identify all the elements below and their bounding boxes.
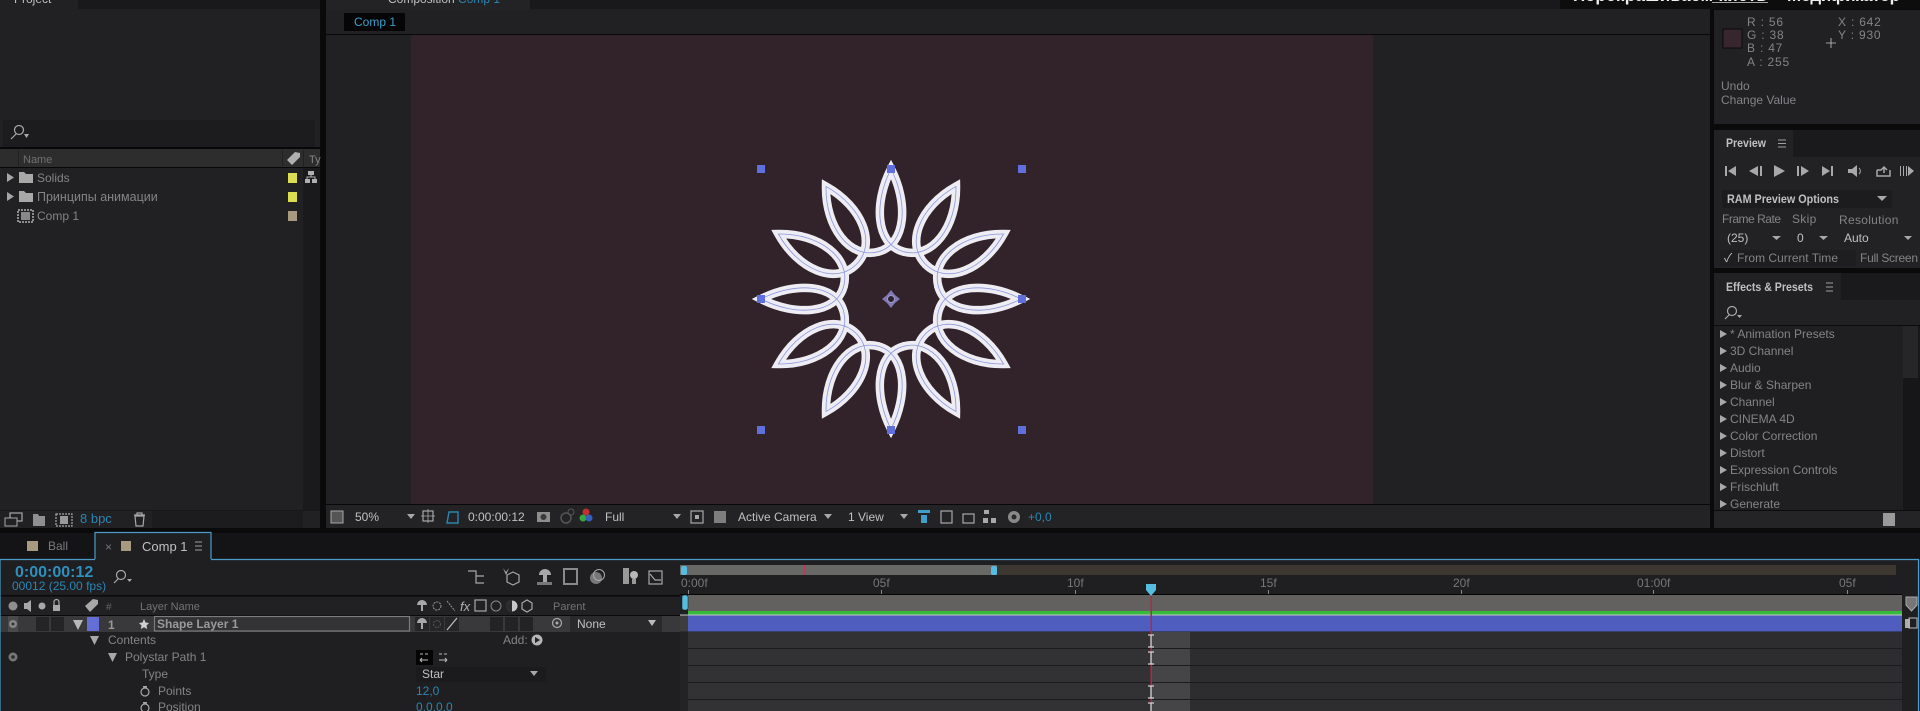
project item: Comp 1 xyxy=(18,209,297,223)
comp 1 breadcrumb chip xyxy=(344,13,405,31)
effects list: Color Correction xyxy=(1730,429,1817,443)
frame rate, skip, resolution: Resolution xyxy=(1839,213,1899,227)
effects list: Blur & Sharpen xyxy=(1730,378,1811,392)
time ruler: 10f xyxy=(1067,576,1084,590)
project search field xyxy=(3,120,315,147)
project footer toolbar: 8 bpc xyxy=(80,511,112,526)
time ruler xyxy=(681,576,1856,594)
playback checkbox options xyxy=(1720,250,1918,266)
colour values: A : 255 xyxy=(1747,55,1790,69)
time ruler: 0:00f xyxy=(681,576,708,590)
tab: Comp 1 active: Comp 1 xyxy=(142,539,188,554)
playback checkbox options: From Current Time xyxy=(1737,251,1838,265)
cursor position values: Y : 930 xyxy=(1838,28,1881,42)
playback checkbox options: Full Screen xyxy=(1860,251,1918,265)
shape layer row: 1 xyxy=(108,618,115,632)
render status green line xyxy=(688,611,1902,614)
project footer toolbar xyxy=(0,510,320,528)
panel: project xyxy=(0,0,321,528)
playhead xyxy=(1146,584,1156,711)
colour values: R : 56 xyxy=(1747,15,1784,29)
viewer toolbar xyxy=(326,505,1710,528)
shape layer row: Shape Layer 1 xyxy=(157,617,239,631)
project item: animation principles folder: Принципы анимации xyxy=(37,190,158,204)
RAM preview options dropdown xyxy=(1722,190,1892,208)
frame rate, skip, resolution: (25) xyxy=(1727,231,1748,245)
effects heading: Effects & Presets xyxy=(1726,280,1813,294)
RAM preview options dropdown: RAM Preview Options xyxy=(1727,192,1839,206)
layer column header: Layer Name xyxy=(140,601,200,613)
effects list: Generate xyxy=(1730,497,1780,511)
time ruler: 01:00f xyxy=(1637,576,1671,590)
frame rate, skip, resolution xyxy=(1722,212,1912,245)
type row: Star xyxy=(422,667,444,681)
effects list xyxy=(1716,326,1902,511)
effects list: Frischluft xyxy=(1730,480,1779,494)
project item: animation principles folder xyxy=(7,190,297,204)
tab: Comp 1 active: × xyxy=(105,540,112,554)
layer column header: # xyxy=(106,602,112,613)
layer column header xyxy=(0,597,680,615)
effects list: * Animation Presets xyxy=(1730,327,1835,341)
timeline toolbar icons xyxy=(468,568,662,585)
project column header xyxy=(0,149,321,167)
effects scrollbar xyxy=(1903,326,1920,510)
timeline panel outline xyxy=(0,560,1918,711)
frame rate, skip, resolution: Skip xyxy=(1792,212,1817,226)
polystar path row xyxy=(8,650,447,665)
effects list: CINEMA 4D xyxy=(1730,412,1795,426)
viewer toolbar: 0:00:00:12 xyxy=(468,510,525,524)
project item: Comp 1: Comp 1 xyxy=(37,209,79,223)
panel: preview xyxy=(1714,130,1920,268)
undo history text: Change Value xyxy=(1721,93,1796,107)
work area bar xyxy=(688,595,1902,611)
viewer toolbar: 1 View xyxy=(848,510,884,524)
colour values: G : 38 xyxy=(1747,28,1784,42)
comp 1 breadcrumb chip: Comp 1 xyxy=(354,15,396,29)
colour swatch xyxy=(1723,29,1742,48)
effects list: Channel xyxy=(1730,395,1775,409)
work area start handle xyxy=(682,595,688,610)
project column header: Ty xyxy=(309,154,321,166)
project item: Solids xyxy=(7,171,297,185)
time ruler: 20f xyxy=(1453,576,1470,590)
effects list: Distort xyxy=(1730,446,1765,460)
effects footer xyxy=(1714,510,1920,528)
colour values: B : 47 xyxy=(1747,41,1783,55)
keyframe markers on playhead xyxy=(1148,635,1154,711)
cursor position values xyxy=(1826,15,1882,48)
cursor position values: X : 642 xyxy=(1838,15,1882,29)
layer column header: Parent xyxy=(553,601,585,613)
playback checkbox options: ✓ xyxy=(1724,251,1733,265)
contents row: Contents xyxy=(108,633,156,647)
effects list: 3D Channel xyxy=(1730,344,1793,358)
viewer toolbar: Active Camera xyxy=(738,510,817,524)
shape layer row: None xyxy=(577,617,606,631)
position row xyxy=(141,700,453,711)
effects search xyxy=(1716,300,1920,325)
preview heading: Preview xyxy=(1726,136,1767,150)
time navigator xyxy=(680,565,1896,575)
type row: Type xyxy=(142,667,168,681)
contents row xyxy=(90,633,542,647)
time ruler: 05f xyxy=(873,576,890,590)
timeline search icon xyxy=(114,570,132,583)
frame rate, skip, resolution: Frame Rate xyxy=(1722,212,1781,226)
points row: 12,0 xyxy=(416,684,440,698)
icon: type column network xyxy=(305,171,317,183)
layer column header: fx xyxy=(460,599,471,614)
playback controls xyxy=(1725,165,1914,177)
panel: effects and presets xyxy=(1714,273,1920,528)
tab: Ball xyxy=(27,539,68,553)
project item: Solids: Solids xyxy=(37,171,70,185)
undo history text: Undo xyxy=(1721,79,1750,93)
top right heading fragments xyxy=(1560,0,1920,9)
tab: Ball: Ball xyxy=(48,539,68,553)
tab: Comp 1 active xyxy=(95,532,211,559)
colour values xyxy=(1747,15,1790,69)
undo history text xyxy=(1721,79,1796,107)
points row: Points xyxy=(158,684,191,698)
empty property track rows xyxy=(680,632,1902,711)
effects list: Expression Controls xyxy=(1730,463,1837,477)
project column header: Name xyxy=(23,154,52,166)
frame rate, skip, resolution: 0 xyxy=(1797,231,1804,245)
points row xyxy=(141,684,440,698)
polystar path row: Polystar Path 1 xyxy=(125,650,207,664)
shape layer row xyxy=(0,616,680,632)
effects list: Audio xyxy=(1730,361,1761,375)
type row xyxy=(142,667,546,682)
contents row: Add: xyxy=(503,633,528,647)
timeline tab bar xyxy=(0,532,1920,559)
viewer toolbar: Full xyxy=(605,510,624,524)
panel: timeline layer controls xyxy=(0,559,680,711)
frame rate, skip, resolution: Auto xyxy=(1844,231,1869,245)
time ruler: 15f xyxy=(1260,576,1277,590)
current time display xyxy=(12,564,106,593)
current time display: 00012 (25.00 fps) xyxy=(12,579,106,593)
composition canvas xyxy=(411,35,1373,504)
layer bounding box handles xyxy=(757,165,1026,434)
timeline end cap icons xyxy=(1905,597,1917,628)
time ruler: 05f xyxy=(1839,576,1856,590)
panel: info xyxy=(1714,10,1920,124)
current time display: 0:00:00:12 xyxy=(15,564,93,581)
panel: composition viewer xyxy=(326,0,1710,528)
anchor point xyxy=(882,290,900,308)
panel: timeline tracks xyxy=(680,559,1920,711)
layer duration bar xyxy=(688,616,1902,632)
viewer toolbar: +0,0 xyxy=(1028,510,1052,524)
viewer toolbar: 50% xyxy=(355,510,379,524)
star flower shape layer xyxy=(761,169,1021,429)
